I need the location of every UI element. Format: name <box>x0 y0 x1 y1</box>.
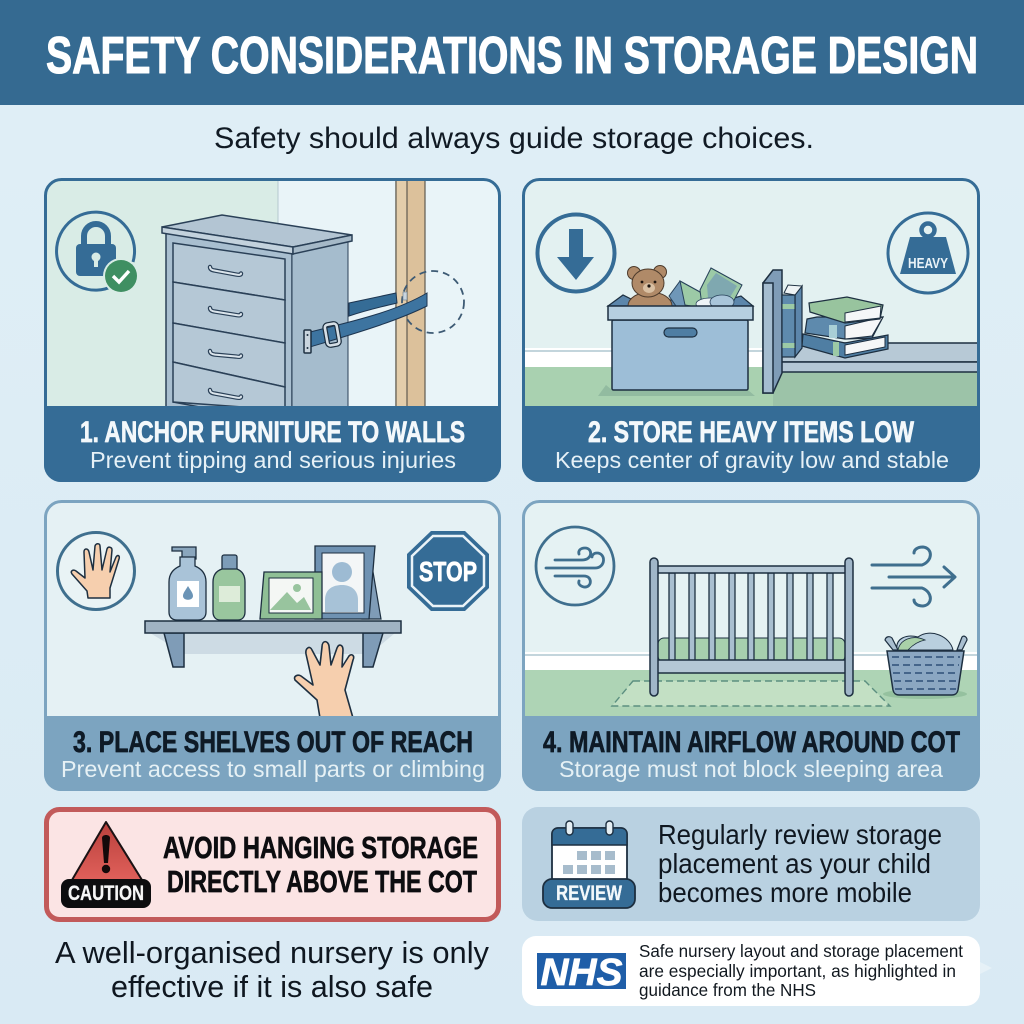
NHS logo: NHS <box>540 952 622 994</box>
dashed anchor circle <box>402 271 464 333</box>
icon: wind arrow <box>872 547 955 606</box>
pump bottle <box>169 547 206 620</box>
NHS guidance text: Safe nursery layout and storage placement <box>639 941 963 961</box>
title banner <box>0 0 1024 105</box>
review message: placement as your child <box>658 848 931 879</box>
shelf shadow <box>150 633 395 654</box>
panel 4 caption: Storage must not block sleeping area <box>559 756 944 782</box>
closing statement: effective if it is also safe <box>111 969 433 1004</box>
icon: stop sign: STOP <box>419 556 477 587</box>
icon: padlock with tick <box>57 212 139 294</box>
laundry basket <box>883 633 967 699</box>
cot <box>650 558 853 696</box>
caution message <box>163 830 478 899</box>
icon: review calendar: REVIEW <box>556 882 622 905</box>
panel 1: anchor furniture <box>44 178 501 482</box>
low shelf with books <box>763 270 982 393</box>
icon: caution triangle: CAUTION <box>68 882 144 905</box>
toy box with teddy bear <box>598 266 755 396</box>
panel 1 caption: Prevent tipping and serious injuries <box>90 447 456 473</box>
icon: caution triangle <box>61 822 151 908</box>
caution message: DIRECTLY ABOVE THE COT <box>167 864 477 899</box>
NHS note <box>522 936 992 1006</box>
icon: heavy weight: HEAVY <box>908 255 948 272</box>
NHS guidance text <box>639 941 963 1000</box>
NHS guidance text: guidance from the NHS <box>639 980 816 1000</box>
panel 3 caption: Prevent access to small parts or climbing <box>61 756 485 782</box>
chest of drawers <box>162 215 352 410</box>
panel 2 heading: 2. STORE HEAVY ITEMS LOW <box>588 416 915 449</box>
green bottle <box>213 555 245 620</box>
wooden wall stud <box>396 178 425 408</box>
portrait frame <box>315 546 381 619</box>
caution callout <box>46 810 498 920</box>
icon: heavy weight <box>888 213 968 293</box>
panel 3 heading: 3. PLACE SHELVES OUT OF REACH <box>73 726 473 759</box>
anchor strap <box>304 292 427 353</box>
child's hand reaching up <box>295 642 354 718</box>
review callout <box>522 807 980 921</box>
panel 4: airflow around cot <box>522 500 980 792</box>
review message: Regularly review storage <box>658 819 942 850</box>
panel 2 caption: Keeps center of gravity low and stable <box>555 447 949 473</box>
panel 3: shelves out of reach <box>44 500 501 792</box>
icon: hand in circle <box>58 532 134 610</box>
NHS guidance text: are especially important, as highlighted in <box>639 961 956 981</box>
icon: review calendar <box>543 821 635 908</box>
closing statement: A well-organised nursery is only <box>55 935 489 970</box>
panel 1 heading: 1. ANCHOR FURNITURE TO WALLS <box>80 416 465 449</box>
review message <box>658 819 942 908</box>
intro sentence: Safety should always guide storage choices. <box>214 122 814 155</box>
icon: wind in circle <box>536 527 614 605</box>
icon: down arrow <box>538 214 614 292</box>
dashed floor zone <box>612 681 890 706</box>
review message: becomes more mobile <box>658 877 912 908</box>
caution message: AVOID HANGING STORAGE <box>163 830 478 865</box>
panel 2: heavy items low <box>522 178 982 482</box>
green picture frame <box>260 572 322 619</box>
closing statement <box>55 935 489 1004</box>
wall shelf <box>145 621 401 667</box>
icon: stop sign <box>407 531 489 611</box>
